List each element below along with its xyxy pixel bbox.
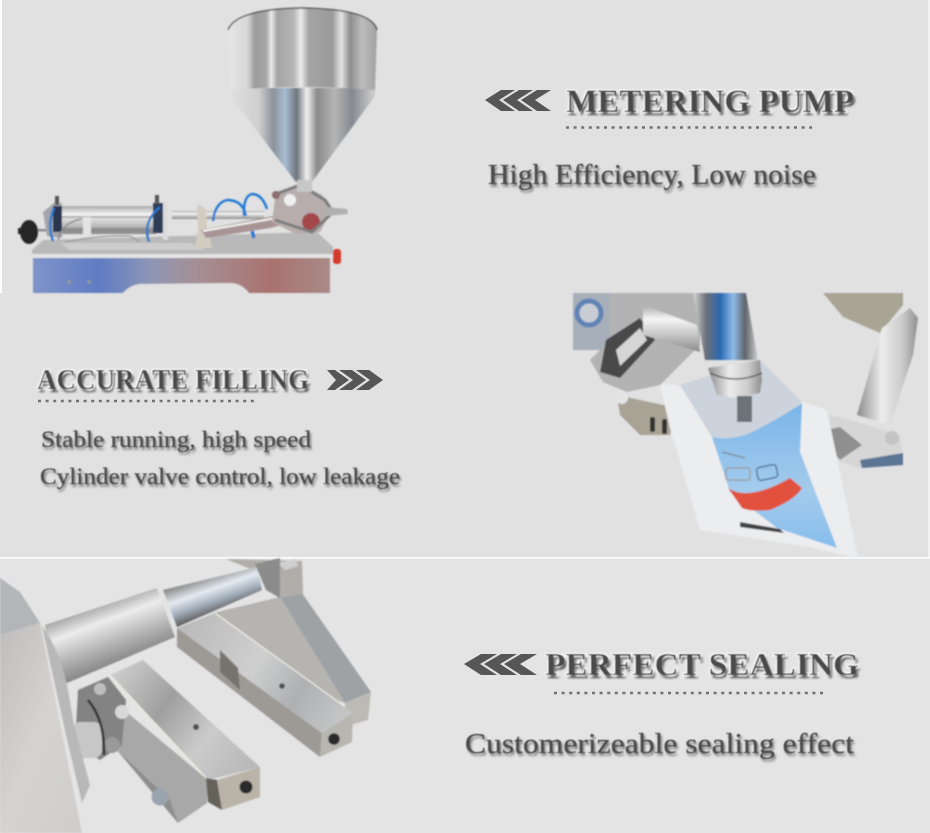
arrows: accurate filling <box>327 370 383 390</box>
left fittings <box>573 293 700 435</box>
pump rods and pipes <box>172 194 336 248</box>
plate bolts <box>72 677 129 760</box>
text: high efficiency: High Efficiency, Low noise <box>488 160 816 191</box>
far sealing bar <box>177 613 353 757</box>
machine base <box>32 232 341 293</box>
far bar support <box>213 559 371 726</box>
steel nozzle <box>693 293 762 422</box>
panel: accurate filling <box>37 293 918 558</box>
hopper rim <box>228 8 377 30</box>
machine photo: filling machine with hopper <box>18 8 377 293</box>
text: stable running: Stable running, high speed <box>41 427 311 453</box>
dotted divider <box>566 126 812 129</box>
arrows: perfect sealing <box>464 654 537 675</box>
hopper cylinder <box>228 8 377 90</box>
photo: filling nozzle and pouch <box>573 293 918 558</box>
right clamp arm <box>817 293 918 468</box>
dotted divider <box>38 400 256 402</box>
hopper cone <box>230 88 375 182</box>
air cylinder <box>18 195 168 244</box>
rod clamp <box>255 558 280 598</box>
hopper neck <box>297 180 312 192</box>
near sealing bar <box>100 660 260 823</box>
heading: perfect sealing: PERFECT SEALING <box>545 646 859 682</box>
piston rod <box>163 567 262 627</box>
end plate front <box>0 623 82 833</box>
end plate <box>0 578 40 635</box>
valve cluster <box>272 184 348 234</box>
heading: accurate filling: ACCURATE FILLING <box>37 364 309 396</box>
panel: metering pump <box>18 8 854 293</box>
heading: metering pump: METERING PUMP <box>566 84 854 120</box>
text: cylinder valve: Cylinder valve control, low leakage <box>40 464 400 490</box>
main cylinder <box>45 588 175 683</box>
pouch <box>660 360 858 558</box>
dotted divider <box>554 692 826 694</box>
photo: sealing bars <box>0 558 371 833</box>
flange <box>42 626 90 803</box>
text: customerizeable: Customerizeable sealing effect <box>465 729 854 760</box>
arrows: metering pump <box>485 90 551 111</box>
panel: perfect sealing <box>0 558 859 833</box>
